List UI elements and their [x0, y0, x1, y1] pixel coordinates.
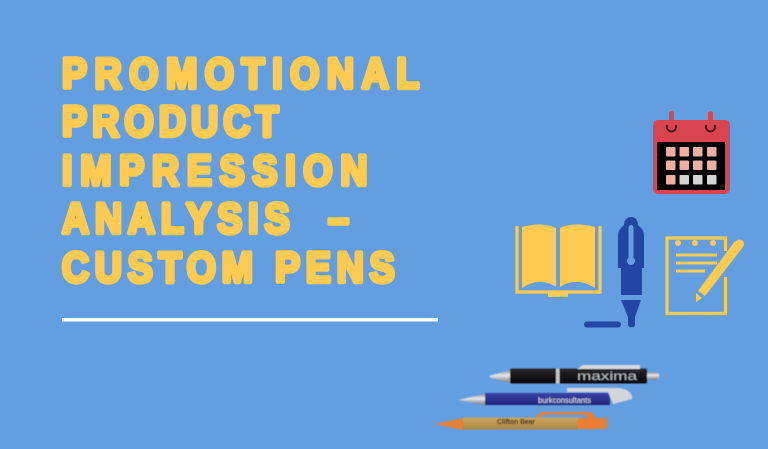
pen: maxima: maxima [577, 369, 637, 383]
divider line [62, 318, 438, 322]
title: PRODUCT [62, 99, 279, 146]
pen: orange kraft: Clifton Bear [497, 419, 535, 426]
pen: orange kraft [435, 412, 607, 430]
icon: marker pen [584, 217, 644, 328]
icon: calendar [653, 111, 730, 194]
pen: blue [458, 388, 632, 405]
title: IMPRESSION [62, 148, 367, 195]
pen: blue: burkconsultants [538, 396, 591, 405]
image: three custom pens [435, 365, 659, 430]
icon: notepad with pencil [667, 238, 744, 314]
pen: maxima [489, 365, 659, 384]
title: PROMOTIONAL [62, 51, 419, 98]
icon: open book [517, 224, 600, 297]
title [62, 51, 419, 292]
title: ANALYSIS – [62, 196, 349, 243]
title: CUSTOM PENS [62, 245, 395, 292]
